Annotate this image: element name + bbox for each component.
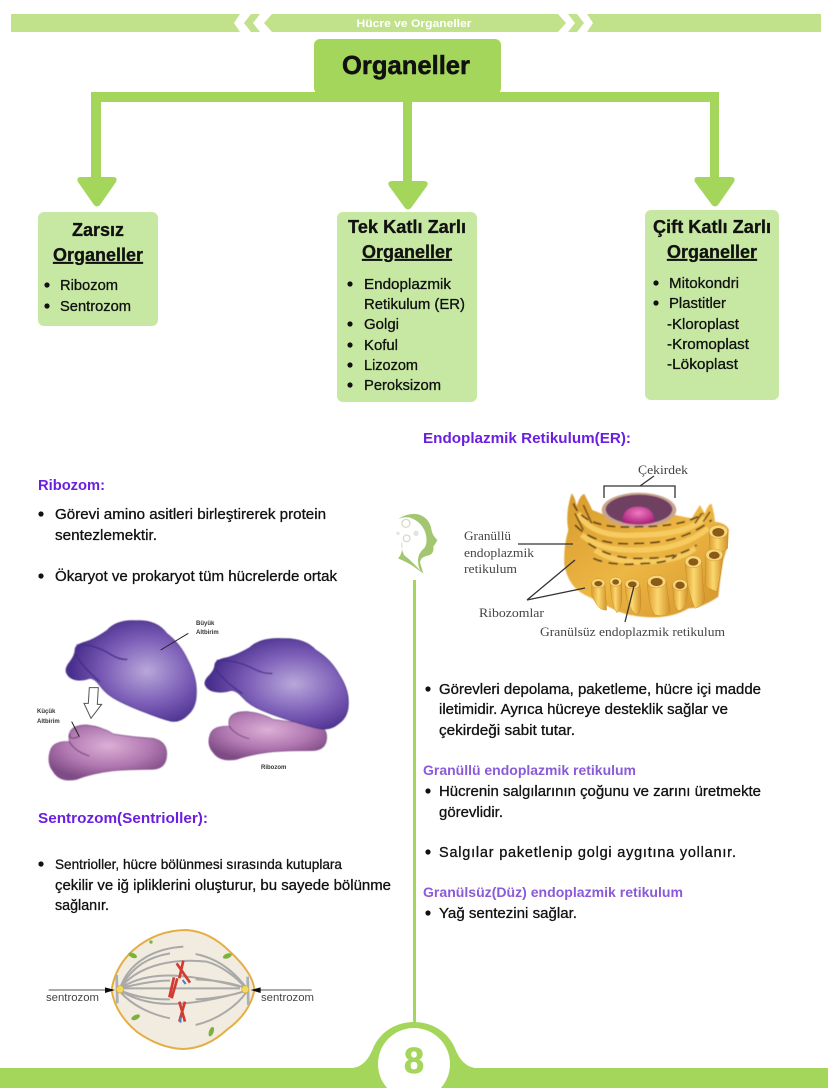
list: Endoplazmik [364,277,452,293]
title box [314,39,501,94]
label: Granülsüz endoplazmik retikulum: Granülsüz endoplazmik retikulum [540,625,725,639]
footer band with page number [0,1022,828,1088]
text block: Sentrozom bullet [38,857,391,914]
drawing: arrow and leader lines [72,633,188,737]
heading: Granülsüz ER: Granülsüz(Düz) endoplazmik retikulum [423,885,683,900]
label: sentrozom left: sentrozom [46,992,99,1004]
illustration: endoplasmic reticulum [464,463,729,639]
text block: Sentrozom bullet: çekilir ve iğ ipliklerini oluşturur, bu sayede bölünme [55,878,391,894]
label: Granüllü endoplazmik retikulum: retikulum [464,562,517,576]
text block: Ribozom bullets: sentezlemektir. [55,528,157,544]
text block: Granülsüz ER bullet: Yağ sentezini sağlar. [439,906,577,922]
label: Granüllü endoplazmik retikulum: Granüllü [464,529,512,543]
ribbon title: Hücre ve Organeller [356,18,472,30]
text block: Sentrozom bullet: sağlanır. [55,898,109,914]
text block: Granüllü ER bullets: Hücrenin salgılarının çoğunu ve zarını üretmekte [439,784,761,800]
list: Golgi [364,317,399,333]
drawing: tubes [592,525,728,616]
connector bars [91,92,719,190]
panel subheading: Organeller [53,245,143,265]
list: Peroksizom [364,378,441,394]
label: Ribozomlar: Ribozomlar [479,606,545,620]
label: Granüllü endoplazmik retikulum: endoplazmik [464,546,535,560]
ribbon center band [264,14,566,32]
text block: Granüllü ER bullets [425,784,761,861]
text block: ER functions: çekirdeği sabit tutar. [439,723,575,739]
panel: Çift Katlı Zarlı Organeller [645,210,779,400]
text block: Ribozom bullets [38,507,338,585]
text block: ER functions: iletimidir. Ayrıca hücreye desteklik sağlar ve [439,702,728,718]
label: Çekirdek: Çekirdek [638,463,689,477]
arrow: left [77,177,117,206]
label: Büyük Altbirim: Altbirim [196,630,219,636]
icon: head silhouette [396,514,437,573]
tree connectors and arrows [77,92,735,210]
label: Ribozom: Ribozom [261,765,286,771]
drawing: leader lines [518,476,675,622]
heading: Ribozom: Ribozom: [38,478,105,494]
header ribbon [11,14,821,32]
label: Granüllü endoplazmik retikulum [464,529,535,576]
ribbon right bar [587,14,821,32]
list [44,278,131,315]
illustration: ribosome subunits [37,621,348,780]
text block: Ribozom bullets: Ökaryot ve prokaryot tüm hücrelerde ortak [55,567,338,585]
text block: ER functions [425,682,761,739]
text block: Sentrozom bullet: Sentrioller, hücre bölünmesi sırasında kutuplara [55,857,342,872]
list: Ribozom [60,278,118,294]
heading: Endoplazmik Retikulum: Endoplazmik Retikulum(ER): [423,431,631,447]
ribbon left chevron [244,14,260,32]
label: Küçük Altbirim: Küçük [37,709,55,715]
label: Büyük Altbirim: Büyük [196,621,214,627]
drawing: ribosome shapes [49,621,348,780]
list: -Kloroplast [667,317,739,333]
text block: Ribozom bullets: Görevi amino asitleri birleştirerek protein [55,507,326,523]
heading: Sentrozom: Sentrozom(Sentrioller): [38,811,208,827]
text block: ER functions: Görevleri depolama, paketleme, hücre içi madde [439,682,761,698]
list: -Lökoplast [667,357,738,373]
list: Koful [364,338,398,354]
text block: Granüllü ER bullets: Salgılar paketlenip golgi aygıtına yollanır. [439,845,736,861]
ribbon left bar [11,14,240,32]
label: Küçük Altbirim: Altbirim [37,719,60,725]
drawing: organelle body [564,493,729,617]
drawing: cell [49,930,312,1049]
panel: Zarsız Organeller [38,212,158,326]
panel subheading: Organeller [362,242,452,262]
arrow: center [388,181,428,210]
text block: Granüllü ER bullets: görevlidir. [439,805,503,821]
list [347,277,465,394]
panel heading: Çift Katlı Zarlı [653,217,771,237]
list: Sentrozom [60,299,131,315]
page number: 8 [404,1040,424,1081]
panel heading: Zarsız [72,220,124,240]
ribbon right chevron [568,14,584,32]
list: -Kromoplast [667,337,749,353]
list: Plastitler [669,296,726,312]
title box: Organeller [342,50,470,80]
panel: Tek Katlı Zarlı Organeller [337,212,477,402]
panel heading: Tek Katlı Zarlı [348,217,466,237]
label: sentrozom right: sentrozom [261,992,314,1004]
list: Retikulum (ER) [364,297,465,313]
list: Lizozom [364,358,418,374]
divider line [413,580,416,1025]
list [653,276,749,373]
heading: Granüllü ER: Granüllü endoplazmik retikulum [423,763,636,778]
panel subheading: Organeller [667,242,757,262]
illustration: dividing cell with centrosomes [46,930,314,1049]
list: Mitokondri [669,276,739,292]
arrow: right [694,177,735,206]
